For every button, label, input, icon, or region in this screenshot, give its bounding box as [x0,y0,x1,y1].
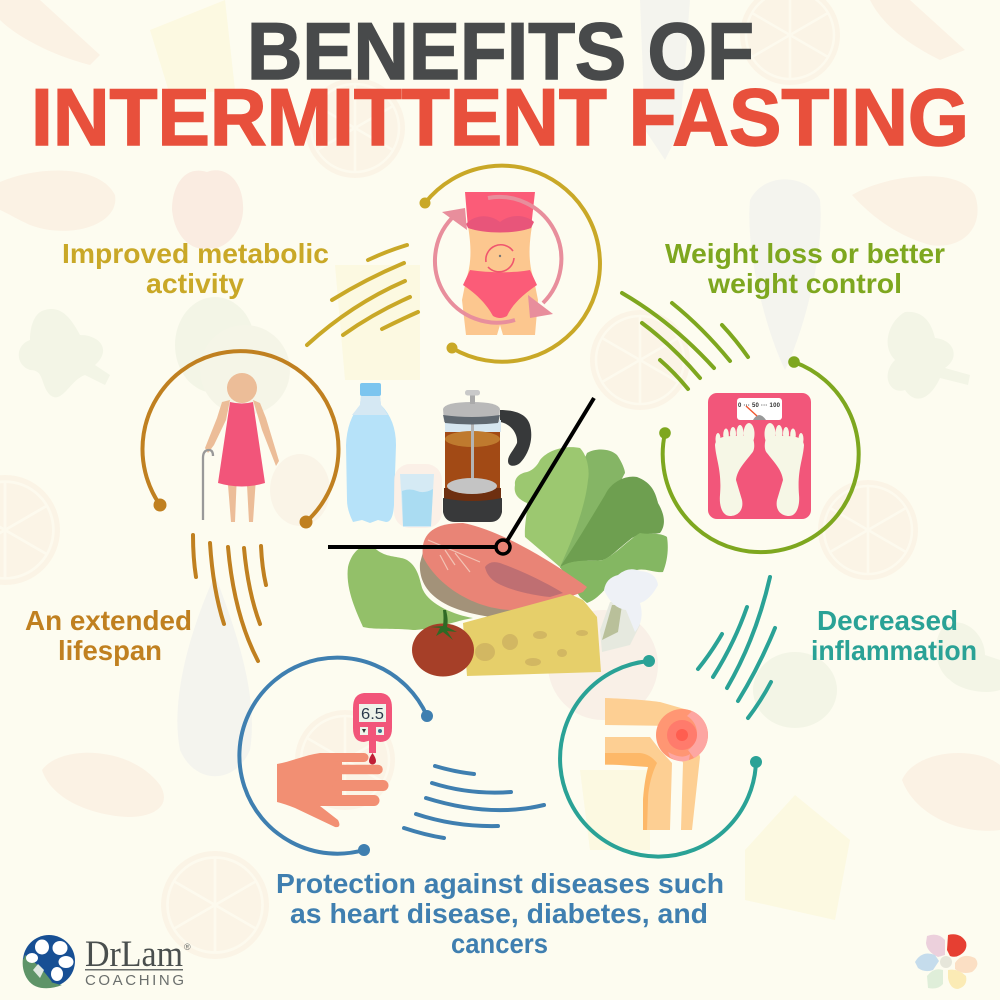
icon: french press [443,390,531,522]
heading: inflammation: Decreased [817,605,958,636]
ring: lifespan [142,351,338,526]
title line 1: BENEFITS OF [247,7,754,97]
motion lines: inflammation [698,577,775,718]
heading: weight: weight control [707,268,902,299]
heading: metabolic: activity [146,268,244,299]
icon: inflamed knee [605,698,708,830]
icon: hand with glucose meter reading 6.5 [277,693,392,827]
logo: DrLam Coaching: ® [184,942,191,952]
icon: bathroom scale with feet: 0 ··· 50 ··· 100 [738,403,781,409]
ring: weight [661,358,859,552]
title [31,7,969,163]
heading: diseases: Protection against diseases such [276,868,724,899]
heading: lifespan: lifespan [58,635,162,666]
ring: metabolic [422,166,600,362]
icon: salmon steak [420,523,587,618]
icon: bathroom scale with feet [708,393,811,519]
icon: tomato [412,610,474,676]
panel: weight loss [622,238,945,552]
motion lines: lifespan [193,535,266,661]
panel: protection against diseases [239,658,724,959]
icon: wedge of cheese [463,594,601,676]
icon: water bottle [346,383,396,523]
icon: glass of water [394,464,442,528]
heading: inflammation: inflammation [811,635,977,666]
motion lines: metabolic [307,245,418,345]
heading: metabolic: Improved metabolic [62,238,329,269]
ring: inflammation [560,657,760,857]
logo: DrLam Coaching: COACHING [85,972,184,989]
central food illustration [346,383,668,676]
heading: diseases: as heart disease, diabetes, and [290,898,708,929]
logo wordmark: DrLam [85,934,183,975]
motion lines: weight [622,293,748,389]
icon: cauliflower [600,569,658,652]
icon: waist with circular arrows [435,192,561,335]
icon: elderly woman with cane [203,373,279,522]
heading: lifespan: An extended [25,605,192,636]
ring: diseases [239,658,431,854]
heading: diseases: cancers [451,928,548,959]
heading: weight: Weight loss or better [665,238,945,269]
motion lines: diseases [404,766,544,838]
panel: decreased inflammation [560,577,977,857]
icon: hand with glucose meter reading 6.5: 6.5 [361,706,384,723]
title line 2: INTERMITTENT FASTING [31,73,969,163]
logo mark [23,935,75,988]
logo flower bottom right [915,934,977,989]
icon: lettuce leaves [348,447,668,630]
panel: improved metabolic activity [62,166,600,362]
clock hands [328,398,594,554]
panel: extended lifespan [25,351,338,666]
logo: DrLam Coaching [23,934,191,989]
